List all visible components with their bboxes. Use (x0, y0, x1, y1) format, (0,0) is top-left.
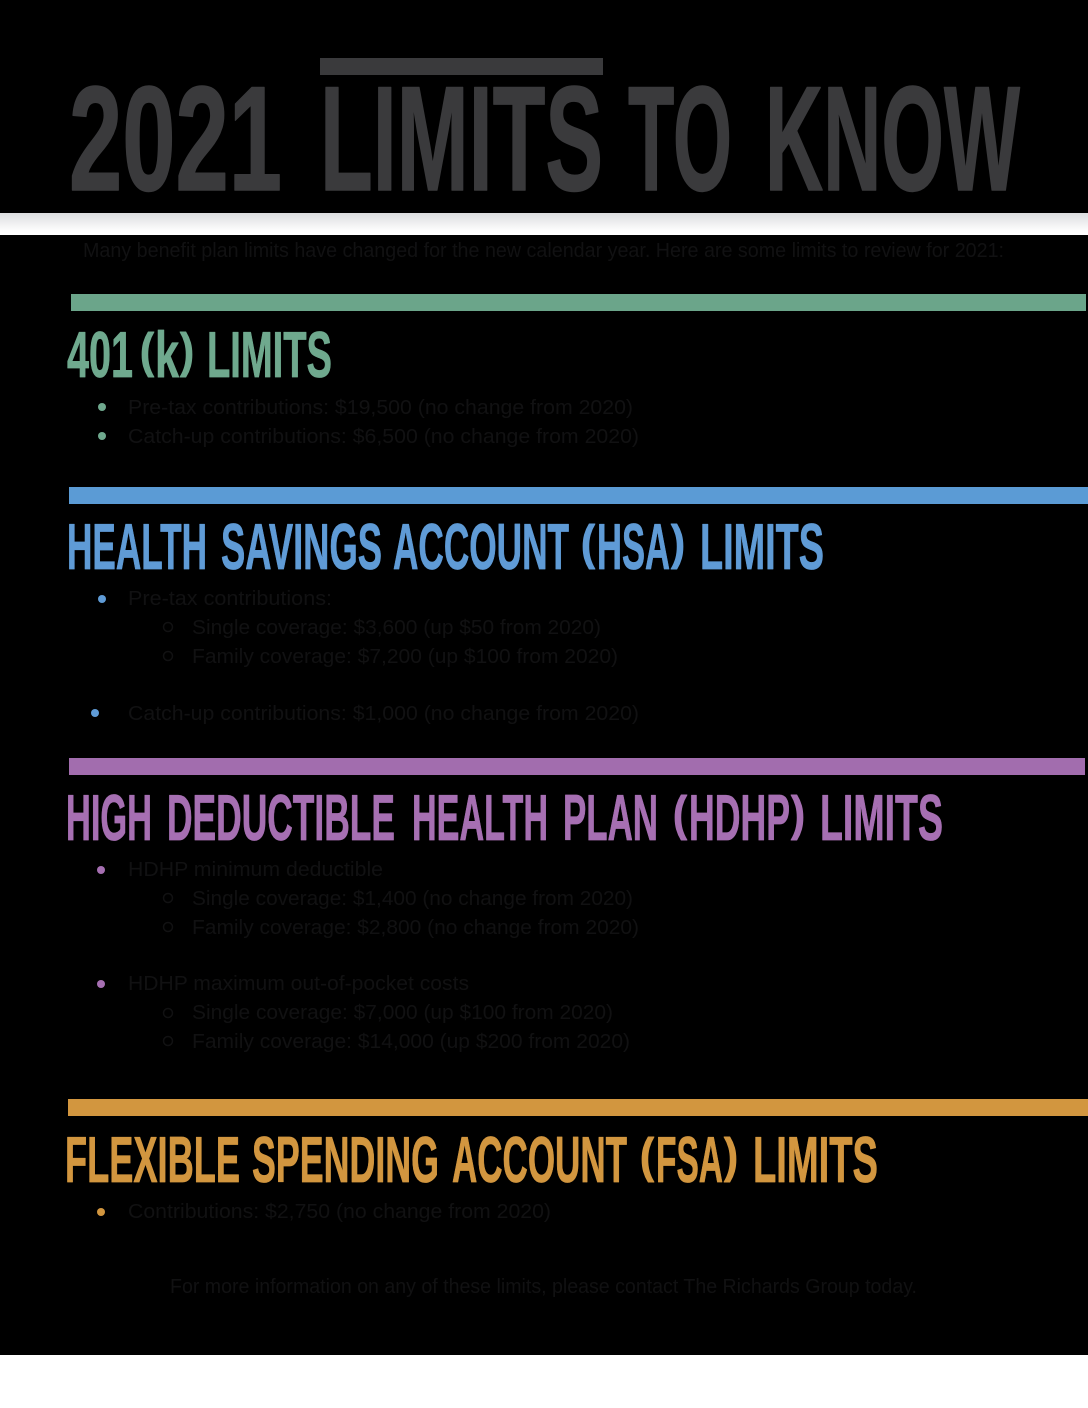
heading: FSA (656, 1123, 723, 1196)
heading: LIMITS (207, 318, 332, 391)
title: TO (628, 55, 732, 222)
section bar (71, 294, 1086, 311)
heading: HIGH (66, 781, 152, 854)
list: Family coverage: $14,000 (up $200 from 2020) (192, 1031, 630, 1053)
closing note: For more information on any of these limits, please contact The Richards Group today. (170, 1276, 917, 1298)
heading: ) (791, 788, 805, 841)
title: 2021 (69, 55, 282, 222)
heading: ACCOUNT (393, 510, 569, 583)
section bar (69, 758, 1085, 775)
list (98, 397, 639, 448)
bottom white band (0, 1355, 1088, 1408)
heading (67, 510, 824, 583)
heading: ( (640, 1130, 654, 1183)
heading: ( (140, 325, 154, 378)
panel: 401(k) limits (67, 294, 1086, 448)
list (91, 588, 639, 725)
heading: LIMITS (700, 510, 824, 583)
heading (65, 1123, 878, 1196)
heading: ) (724, 1130, 738, 1183)
title (69, 55, 1020, 222)
heading: SAVINGS (221, 510, 382, 583)
panel: HDHP limits (66, 758, 1085, 1053)
heading: k (155, 318, 180, 391)
heading: HDHP (689, 781, 790, 854)
heading: PLAN (563, 781, 658, 854)
heading: ACCOUNT (452, 1123, 627, 1196)
panel: FSA limits (65, 1099, 1088, 1223)
heading: DEDUCTIBLE (167, 781, 395, 854)
heading: ) (671, 517, 685, 570)
list: Catch-up contributions: $6,500 (no change from 2020) (128, 426, 639, 448)
list: Pre-tax contributions: $19,500 (no change from 2020) (128, 397, 633, 419)
list: Single coverage: $7,000 (up $100 from 2020) (192, 1002, 613, 1024)
heading: ) (180, 325, 194, 378)
heading: ( (673, 788, 687, 841)
list: Family coverage: $7,200 (up $100 from 2020) (192, 646, 618, 668)
list: Single coverage: $3,600 (up $50 from 2020) (192, 617, 601, 639)
heading: HSA (597, 510, 670, 583)
header white band (0, 213, 1088, 235)
section bar (69, 487, 1088, 504)
list: Catch-up contributions: $1,000 (no change from 2020) (128, 703, 639, 725)
title: LIMITS (320, 55, 603, 222)
heading: 401 (67, 318, 133, 391)
heading: HEALTH (412, 781, 548, 854)
heading (67, 318, 332, 391)
heading: FLEXIBLE (65, 1123, 240, 1196)
panel: HSA limits (67, 487, 1088, 725)
heading: SPENDING (252, 1123, 439, 1196)
title accent bar (320, 58, 603, 75)
heading: LIMITS (820, 781, 943, 854)
list: HDHP minimum deductible (128, 859, 383, 881)
section bar (68, 1099, 1088, 1116)
list (97, 859, 639, 1053)
intro text: Many benefit plan limits have changed for the new calendar year. Here are some limits to review for 2021: (83, 240, 1004, 262)
list: Family coverage: $2,800 (no change from 2020) (192, 917, 639, 939)
list: Contributions: $2,750 (no change from 2020) (128, 1201, 551, 1223)
heading: LIMITS (753, 1123, 878, 1196)
list: HDHP maximum out-of-pocket costs (128, 973, 469, 995)
heading: HEALTH (67, 510, 207, 583)
list: Pre-tax contributions: (128, 588, 332, 610)
heading: ( (581, 517, 595, 570)
list: Single coverage: $1,400 (no change from 2020) (192, 888, 633, 910)
title banner (69, 55, 1020, 222)
heading (66, 781, 943, 854)
